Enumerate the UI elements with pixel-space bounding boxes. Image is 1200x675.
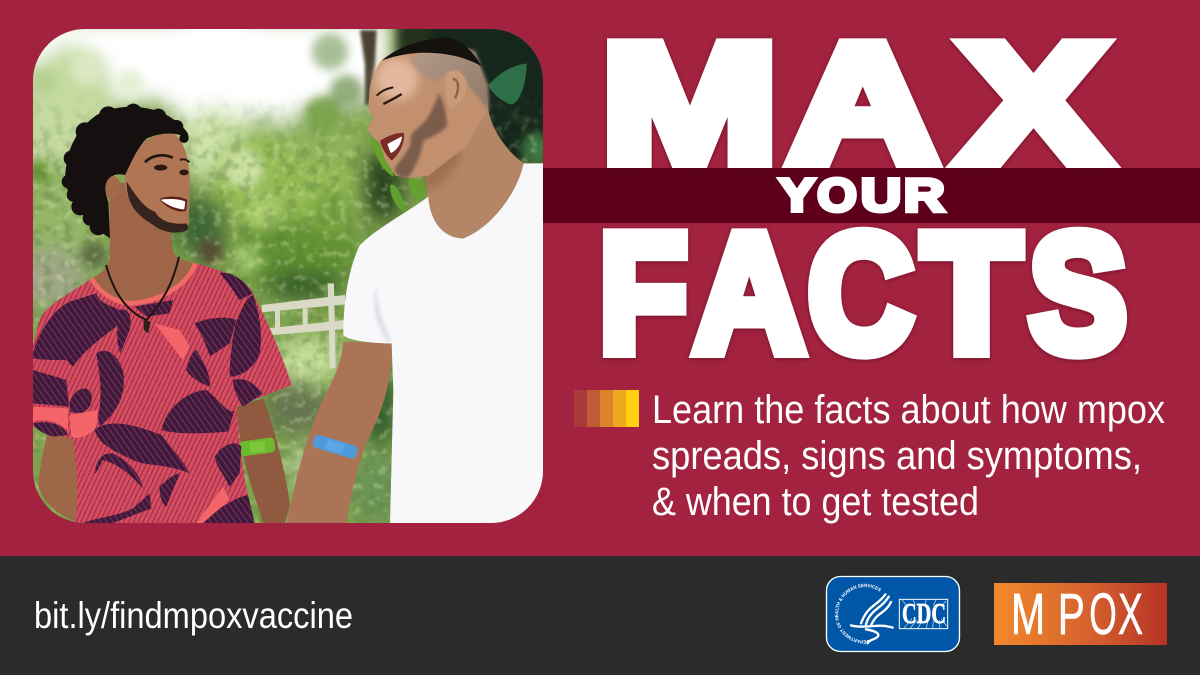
- left man: beard: [127, 182, 189, 233]
- left man: face details: [145, 155, 189, 211]
- left man: ear: [105, 176, 120, 198]
- photo: two smiling men with bandages on their arms: [33, 29, 543, 523]
- right man: head: [367, 37, 489, 178]
- hair fade: [409, 49, 489, 112]
- face details: [377, 87, 393, 96]
- title: FACTS: A: [694, 200, 805, 388]
- title: YOUR: Y: [779, 169, 815, 221]
- right man: arm: [287, 342, 392, 523]
- mouth: [380, 133, 404, 161]
- left man: head: [125, 133, 190, 232]
- left man: far arm: [38, 432, 80, 522]
- title: MAX: M: [602, 9, 777, 197]
- left man: necklace: [106, 257, 179, 333]
- title: FACTS: S: [1029, 199, 1127, 387]
- tree trunk: [360, 30, 377, 105]
- shirt: collar: [92, 263, 195, 303]
- left man: curly hair: [62, 104, 189, 238]
- logo: MPOX: X: [1118, 583, 1143, 647]
- logo: MPOX: P: [1058, 582, 1085, 647]
- title: YOUR: [779, 169, 945, 221]
- shirt: bright coral patches: [33, 323, 230, 523]
- left man: near arm: [237, 398, 290, 523]
- right man: white T-shirt: [343, 163, 545, 523]
- text block: description: & when to get tested: [652, 480, 979, 524]
- seal text: DEPARTMENT OF HEALTH & HUMAN SERVICES USA: [834, 584, 882, 644]
- title: FACTS: [599, 199, 1127, 388]
- large leaves behind right man: [370, 63, 527, 213]
- icon: gradient stripe accent: [574, 390, 639, 427]
- icon: green bandage: [239, 437, 276, 457]
- right man: shadow under jaw: [418, 152, 461, 192]
- icon: blue bandage: [312, 434, 358, 458]
- text block: description: [652, 388, 1165, 524]
- ear inner fold: [453, 79, 458, 98]
- decorative band behind YOUR: [543, 168, 1200, 223]
- logo: MPOX: [994, 581, 1167, 647]
- left man: neck: [92, 182, 195, 303]
- left man: patterned shirt: [33, 263, 292, 523]
- CDC box: CDC: [902, 599, 946, 630]
- cropped hair: [382, 37, 482, 66]
- logo: MPOX: O: [1089, 583, 1117, 647]
- logo: MPOX: M: [1011, 581, 1045, 647]
- foliage texture: [33, 101, 543, 523]
- icon: HHS eagle: [851, 594, 893, 643]
- teeth: [387, 136, 402, 153]
- title: MAX: X: [960, 10, 1107, 197]
- text block: description: spreads, signs and symptoms,: [652, 434, 1142, 478]
- footer URL: bit.ly/findmpoxvaccine: [34, 595, 353, 636]
- forehead highlight: [375, 57, 418, 101]
- title: MAX: A: [789, 9, 937, 197]
- title: YOUR: R: [904, 169, 945, 221]
- title: MAX: [602, 9, 1107, 197]
- right man: shirt sleeve shading: [374, 285, 392, 342]
- title: FACTS: F: [599, 200, 687, 387]
- shirt: dark leaves: [33, 273, 263, 523]
- title: YOUR: U: [861, 170, 901, 221]
- title: YOUR: O: [817, 170, 857, 221]
- title: FACTS: T: [922, 199, 1021, 387]
- right man: neck and chest: [417, 108, 523, 238]
- ear: [445, 71, 467, 108]
- footer bar: [0, 556, 1200, 675]
- beard: [394, 92, 447, 178]
- title: FACTS: C: [808, 200, 913, 387]
- shirt: leaf veins: [33, 273, 263, 523]
- logo: HHS and CDC: [826, 576, 960, 652]
- white fence: [262, 283, 345, 368]
